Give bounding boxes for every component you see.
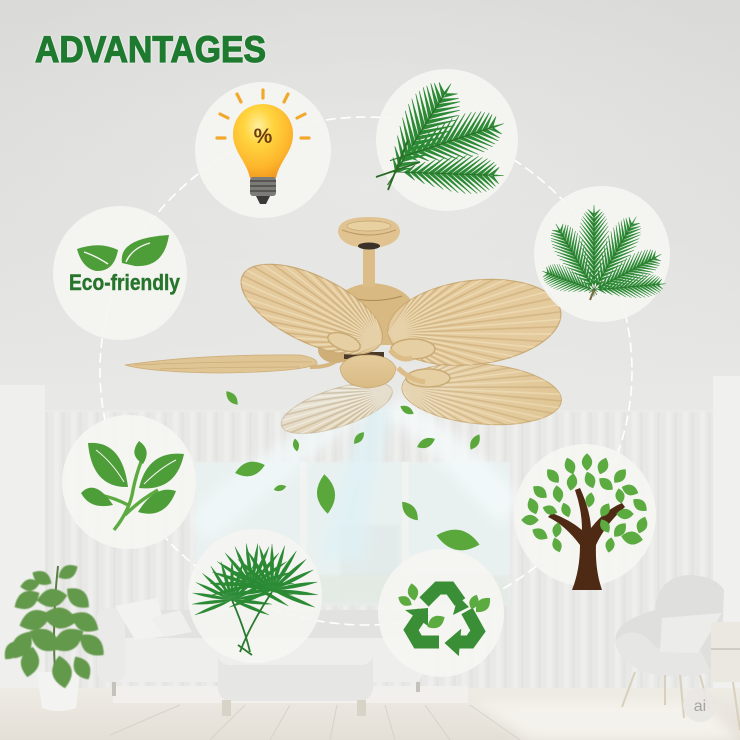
label: Eco-friendly <box>69 270 181 295</box>
icon: tree <box>521 453 650 590</box>
title: ADVANTAGES <box>35 29 266 70</box>
icon: recycle arrows <box>396 582 494 654</box>
motor housing <box>318 283 411 363</box>
icon: fan palm leaves <box>192 538 318 655</box>
back wall with curtains <box>0 410 740 690</box>
panel: eco-friendly <box>53 206 187 340</box>
panel: palm frond top <box>366 69 518 211</box>
light cap <box>340 355 396 388</box>
panel: energy saving bulb <box>195 82 331 218</box>
dashed orbit circle <box>100 117 632 625</box>
ottoman <box>218 643 373 716</box>
panel: palm frond right <box>534 186 670 322</box>
icon: two leaves <box>77 235 169 271</box>
icon: light bulb: % <box>254 125 273 148</box>
dresser <box>711 622 740 730</box>
panel: recycling <box>378 549 504 677</box>
ai watermark: ai <box>694 698 706 715</box>
ceiling fan <box>124 217 562 434</box>
canopy and downrod <box>338 217 400 287</box>
sofa <box>97 598 422 696</box>
floor <box>0 688 740 740</box>
icon: feather palm <box>538 205 668 304</box>
blade brackets <box>325 329 450 387</box>
potted plant <box>0 561 110 711</box>
ai watermark <box>683 688 717 722</box>
blade: upper left <box>240 264 383 355</box>
blade: upper right <box>388 278 562 366</box>
blade: left flat <box>125 352 345 373</box>
air flow <box>190 395 520 560</box>
rug <box>113 686 468 703</box>
panel: tree <box>514 444 656 590</box>
blade: bottom <box>280 384 393 434</box>
icon: light rays <box>217 90 309 138</box>
armchair <box>616 575 724 718</box>
icon: recycle leaves <box>396 582 494 632</box>
icon: palm fronds <box>366 70 511 198</box>
blade: lower right <box>401 364 562 426</box>
panel: fan palm <box>188 529 322 663</box>
falling leaves <box>223 389 483 554</box>
icon: branch with leaves <box>81 441 184 530</box>
side walls <box>0 376 740 690</box>
panel: leafy branch <box>62 415 196 549</box>
